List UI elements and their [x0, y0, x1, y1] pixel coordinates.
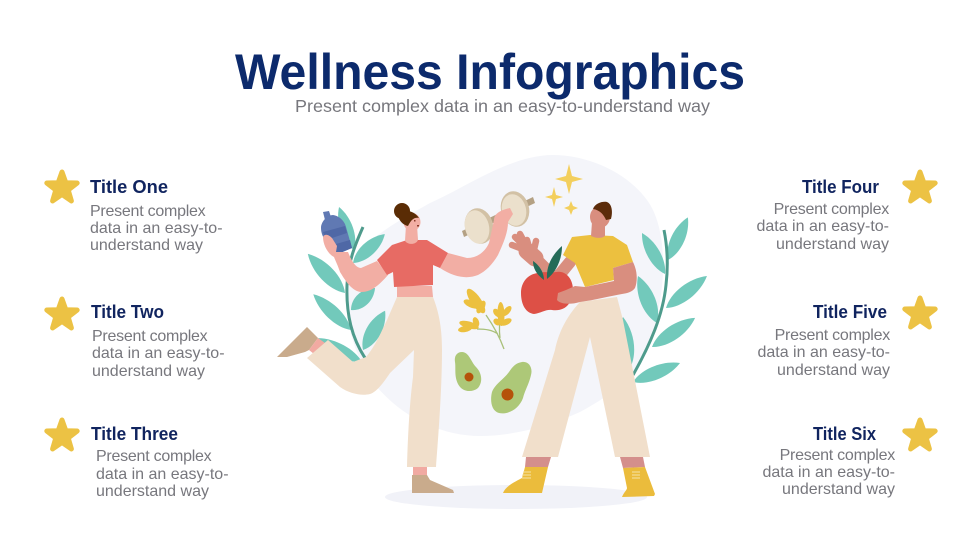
- text block: data in an easy-to-: [92, 345, 225, 362]
- text block: understand way: [782, 481, 895, 498]
- text block: Present complex: [96, 448, 212, 465]
- left boot: [503, 467, 548, 493]
- text block: Present complex: [775, 327, 890, 344]
- sparkles: [545, 164, 583, 215]
- shirt: [563, 235, 633, 287]
- raised sock: [309, 338, 325, 354]
- text block: understand way: [90, 237, 203, 254]
- head: [404, 213, 420, 231]
- standing sock: [413, 466, 427, 475]
- face details: [414, 220, 419, 226]
- item: Title Six: [762, 420, 935, 498]
- standing shoe: [412, 475, 454, 493]
- left plant: [302, 205, 392, 367]
- heading: Title Five: Title Five: [813, 302, 887, 322]
- avocado right: [491, 362, 532, 413]
- apple leaves: [533, 246, 562, 280]
- text block: Present complex: [780, 447, 895, 464]
- icon: star: [47, 172, 77, 201]
- right arm and hand: [557, 262, 637, 304]
- item: Title Four: [756, 172, 935, 253]
- ground shadow: [385, 485, 647, 509]
- text block: data in an easy-to-: [762, 464, 895, 481]
- neck: [405, 225, 418, 244]
- icon: star: [905, 298, 935, 327]
- hair: [394, 203, 419, 226]
- subtitle: Present complex data in an easy-to-understand way: [295, 96, 710, 116]
- text block: data in an easy-to-: [757, 344, 890, 361]
- shirt: [377, 240, 448, 287]
- hair: [593, 202, 612, 220]
- right plant: [616, 215, 711, 388]
- trousers: [522, 297, 650, 457]
- woman figure: [277, 188, 535, 493]
- water bottle: [321, 211, 352, 256]
- left arm and hand: [323, 235, 388, 292]
- text block: Present complex: [774, 201, 889, 218]
- avocado left: [455, 352, 481, 391]
- dumbbell: [461, 188, 535, 247]
- socks: [525, 457, 645, 468]
- yellow sprig: [458, 286, 513, 349]
- text block: Present complex: [90, 203, 206, 220]
- text block: understand way: [92, 363, 205, 380]
- midriff: [397, 286, 433, 297]
- text block: data in an easy-to-: [90, 220, 223, 237]
- item: Title Three: [47, 420, 229, 500]
- man figure: [503, 202, 655, 497]
- right boot: [622, 467, 655, 497]
- item: Title One: [47, 172, 223, 254]
- text block: understand way: [96, 483, 209, 500]
- right arm: [440, 208, 513, 277]
- text block: understand way: [777, 362, 890, 379]
- item: Title Five: [757, 298, 935, 379]
- icon: star: [47, 299, 77, 328]
- icon: star: [905, 172, 935, 201]
- boot laces: [522, 472, 640, 478]
- illustration: wellness scene: [277, 155, 711, 509]
- waving arm and hand: [512, 234, 570, 279]
- title: Wellness Infographics: [235, 44, 745, 100]
- text block: data in an easy-to-: [96, 466, 229, 483]
- background blob: [346, 155, 663, 436]
- text block: data in an easy-to-: [756, 218, 889, 235]
- text block: understand way: [776, 236, 889, 253]
- neck: [591, 222, 605, 238]
- item: Title Two: [47, 299, 225, 380]
- text block: Present complex: [92, 328, 208, 345]
- icon: star: [47, 420, 77, 449]
- raised shoe: [277, 327, 318, 357]
- icon: star: [905, 420, 935, 449]
- heading: Title One: Title One: [90, 177, 168, 197]
- heading: Title Four: Title Four: [802, 177, 879, 197]
- heading: Title Three: Title Three: [91, 424, 178, 444]
- heading: Title Two: Title Two: [91, 302, 164, 322]
- trousers: [307, 297, 442, 467]
- heading: Title Six: Title Six: [813, 424, 876, 444]
- head: [590, 206, 610, 228]
- apple: [521, 272, 573, 314]
